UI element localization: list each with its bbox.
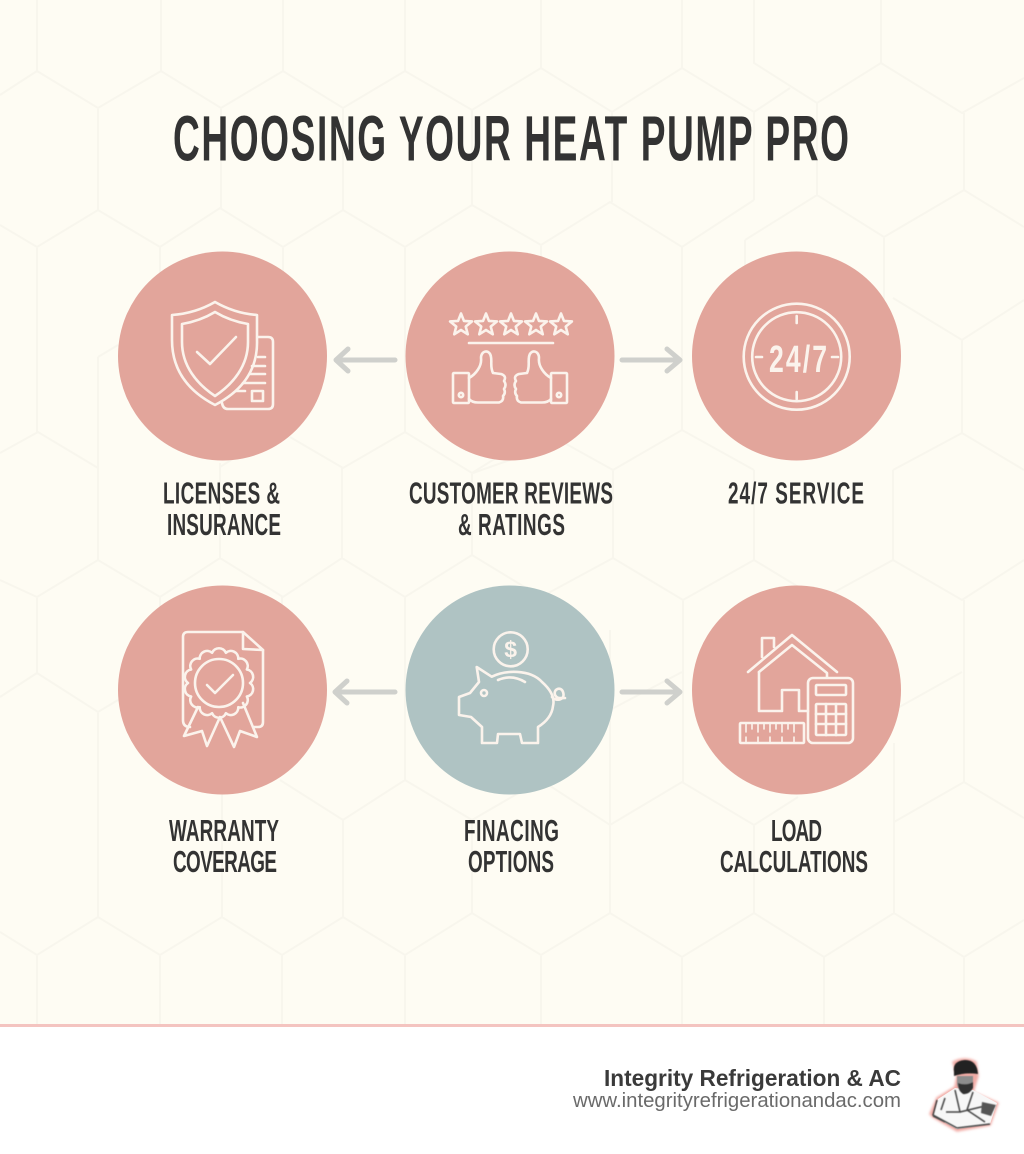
circle: warranty — [118, 586, 327, 794]
arrow: financing to warranty — [335, 681, 395, 703]
circle: licenses — [118, 252, 327, 460]
circle: reviews — [406, 252, 614, 460]
icon: stars and thumbs up — [450, 314, 572, 403]
icon: piggy bank with coin: $ — [504, 636, 517, 662]
logo: technician portrait — [930, 1059, 998, 1131]
icon: 24/7 clock — [744, 304, 850, 410]
label: licenses and insurance: LICENSES & — [163, 477, 280, 511]
item: customer reviews — [406, 252, 614, 542]
circle: financing — [406, 586, 614, 794]
arrow: financing to load calculations — [622, 681, 680, 703]
item: 24/7 service — [692, 252, 901, 511]
item: load calculations — [692, 586, 901, 879]
label: warranty coverage — [169, 815, 279, 879]
circle: 24/7 service — [692, 252, 901, 460]
icon: certificate with rosette — [183, 632, 263, 747]
item: financing options — [406, 586, 614, 879]
label: financing options — [464, 815, 559, 879]
title: CHOOSING YOUR HEAT PUMP PRO — [173, 104, 849, 175]
label: load calculations: CALCULATIONS — [720, 846, 868, 879]
arrow: reviews to licenses — [336, 349, 395, 371]
label: financing options: FINACING — [464, 815, 559, 848]
label: customer reviews — [409, 477, 613, 542]
label: 24/7 service: 24/7 SERVICE — [728, 477, 864, 511]
label: customer reviews: CUSTOMER REVIEWS — [409, 477, 613, 511]
label: warranty coverage: WARRANTY — [169, 815, 279, 848]
arrow: reviews to 24/7 service — [622, 349, 680, 371]
label: licenses and insurance — [163, 477, 281, 542]
item: warranty coverage — [118, 586, 327, 879]
icon: shield and document — [172, 302, 273, 409]
label: warranty coverage: COVERAGE — [173, 846, 277, 879]
label: financing options: OPTIONS — [468, 846, 554, 879]
website: www.integrityrefrigerationandac.com — [572, 1090, 901, 1112]
icon: piggy bank with coin — [459, 632, 565, 743]
icon: house, calculator and ruler — [740, 635, 853, 743]
icon: 24/7 clock: 24/7 — [769, 337, 827, 380]
circle: load calculations — [692, 586, 901, 794]
label: licenses and insurance: INSURANCE — [167, 509, 281, 542]
label: customer reviews: & RATINGS — [458, 509, 565, 542]
label: load calculations — [720, 815, 868, 879]
label: load calculations: LOAD — [771, 815, 822, 848]
item: licenses and insurance — [118, 252, 327, 542]
footer — [0, 1024, 1024, 1154]
company name: Integrity Refrigeration & AC — [604, 1065, 901, 1091]
